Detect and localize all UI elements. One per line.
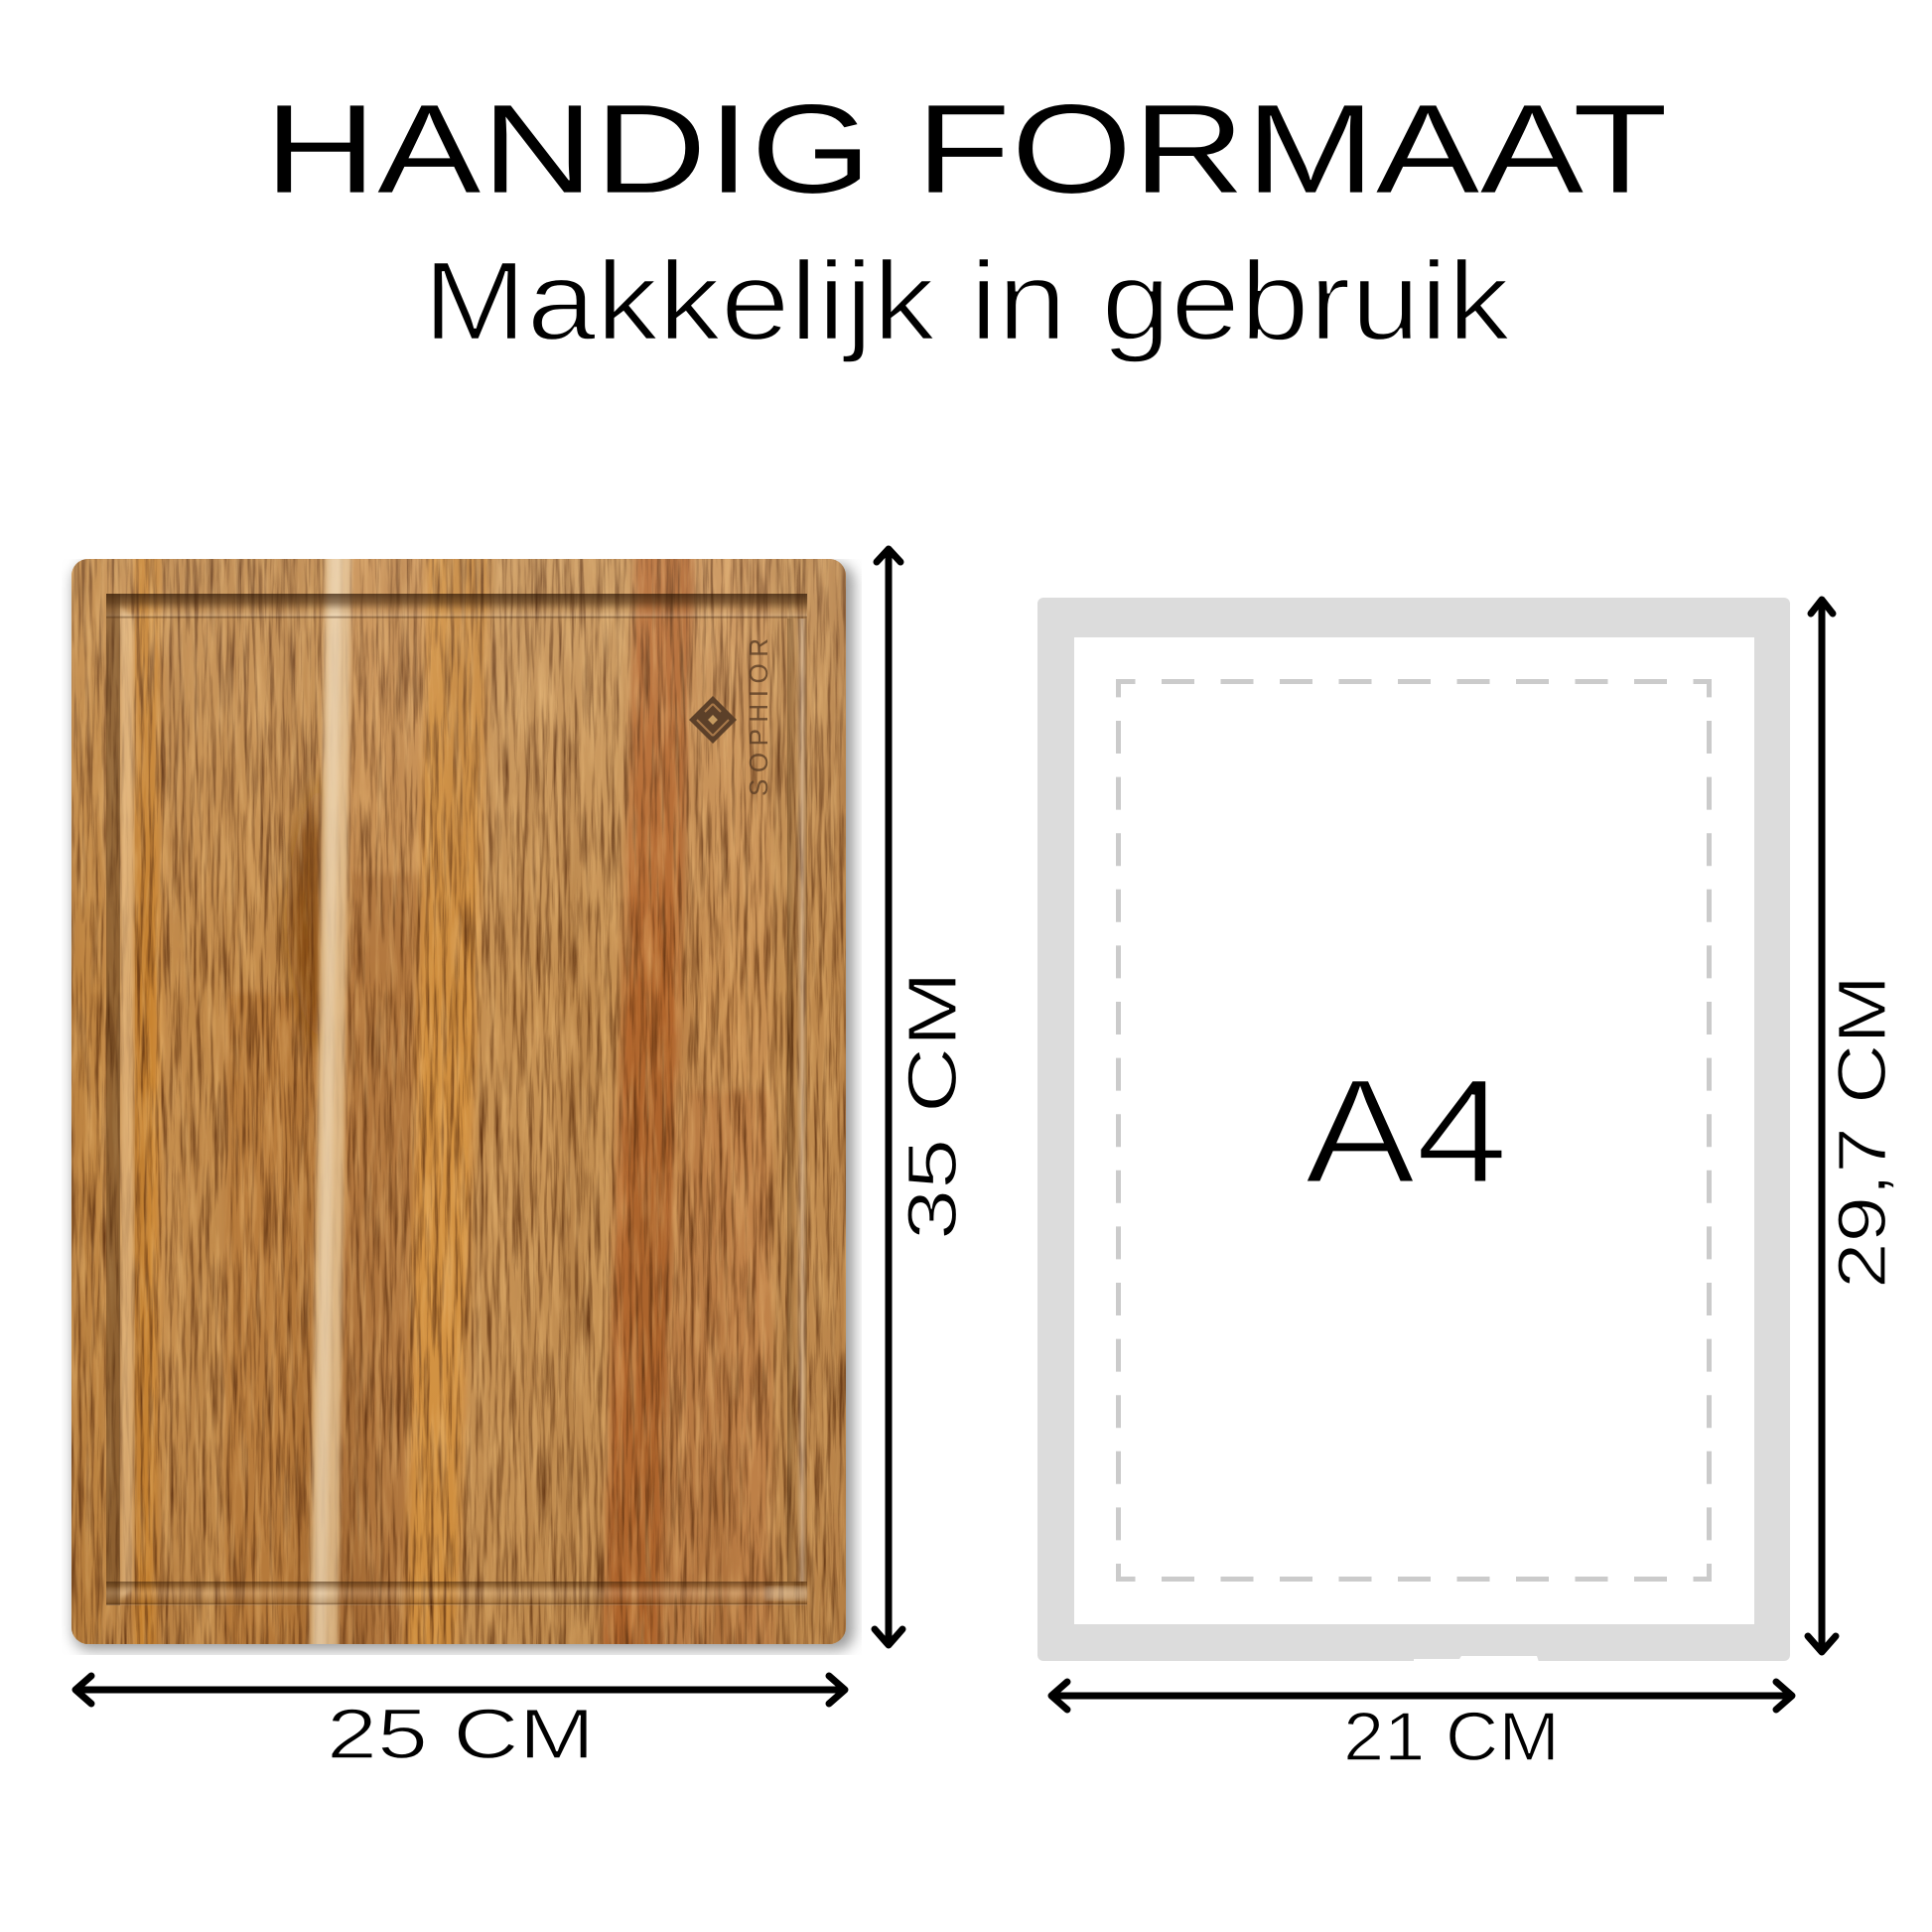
logo: brand name: SOPHIOR: [744, 638, 773, 796]
label: 25 CM: 25 CM: [327, 1696, 595, 1774]
panel: A4 sheet: [1037, 598, 1790, 1662]
arrow: A4 width: [1051, 1682, 1792, 1710]
juice groove: [106, 594, 807, 1605]
title: HANDIG FORMAAT: [264, 78, 1668, 220]
light strip in left groove: [120, 606, 134, 1600]
arrow: board height: [875, 549, 902, 1645]
dashed inner outline: [1116, 679, 1712, 1582]
label: 35 CM: 35 CM: [894, 971, 971, 1240]
wooden board: [60, 546, 864, 1658]
logo: diamond mark: [689, 696, 737, 744]
arrow: board width: [75, 1676, 845, 1704]
arrow: A4 height: [1808, 600, 1836, 1652]
board drop shadow: [73, 564, 854, 1650]
A4 grey frame: [1037, 598, 1790, 1662]
label: 29,7 CM: 29,7 CM: [1824, 975, 1900, 1289]
label: A4: A4: [1305, 1047, 1508, 1214]
wood grain: [60, 546, 864, 1658]
pale sapwood stripe: [310, 546, 351, 1658]
subtitle: Makkelijk in gebruik: [423, 238, 1511, 363]
knot: [287, 764, 324, 1052]
panel: cutting board: [60, 546, 864, 1658]
label: 21 CM: 21 CM: [1343, 1698, 1560, 1775]
